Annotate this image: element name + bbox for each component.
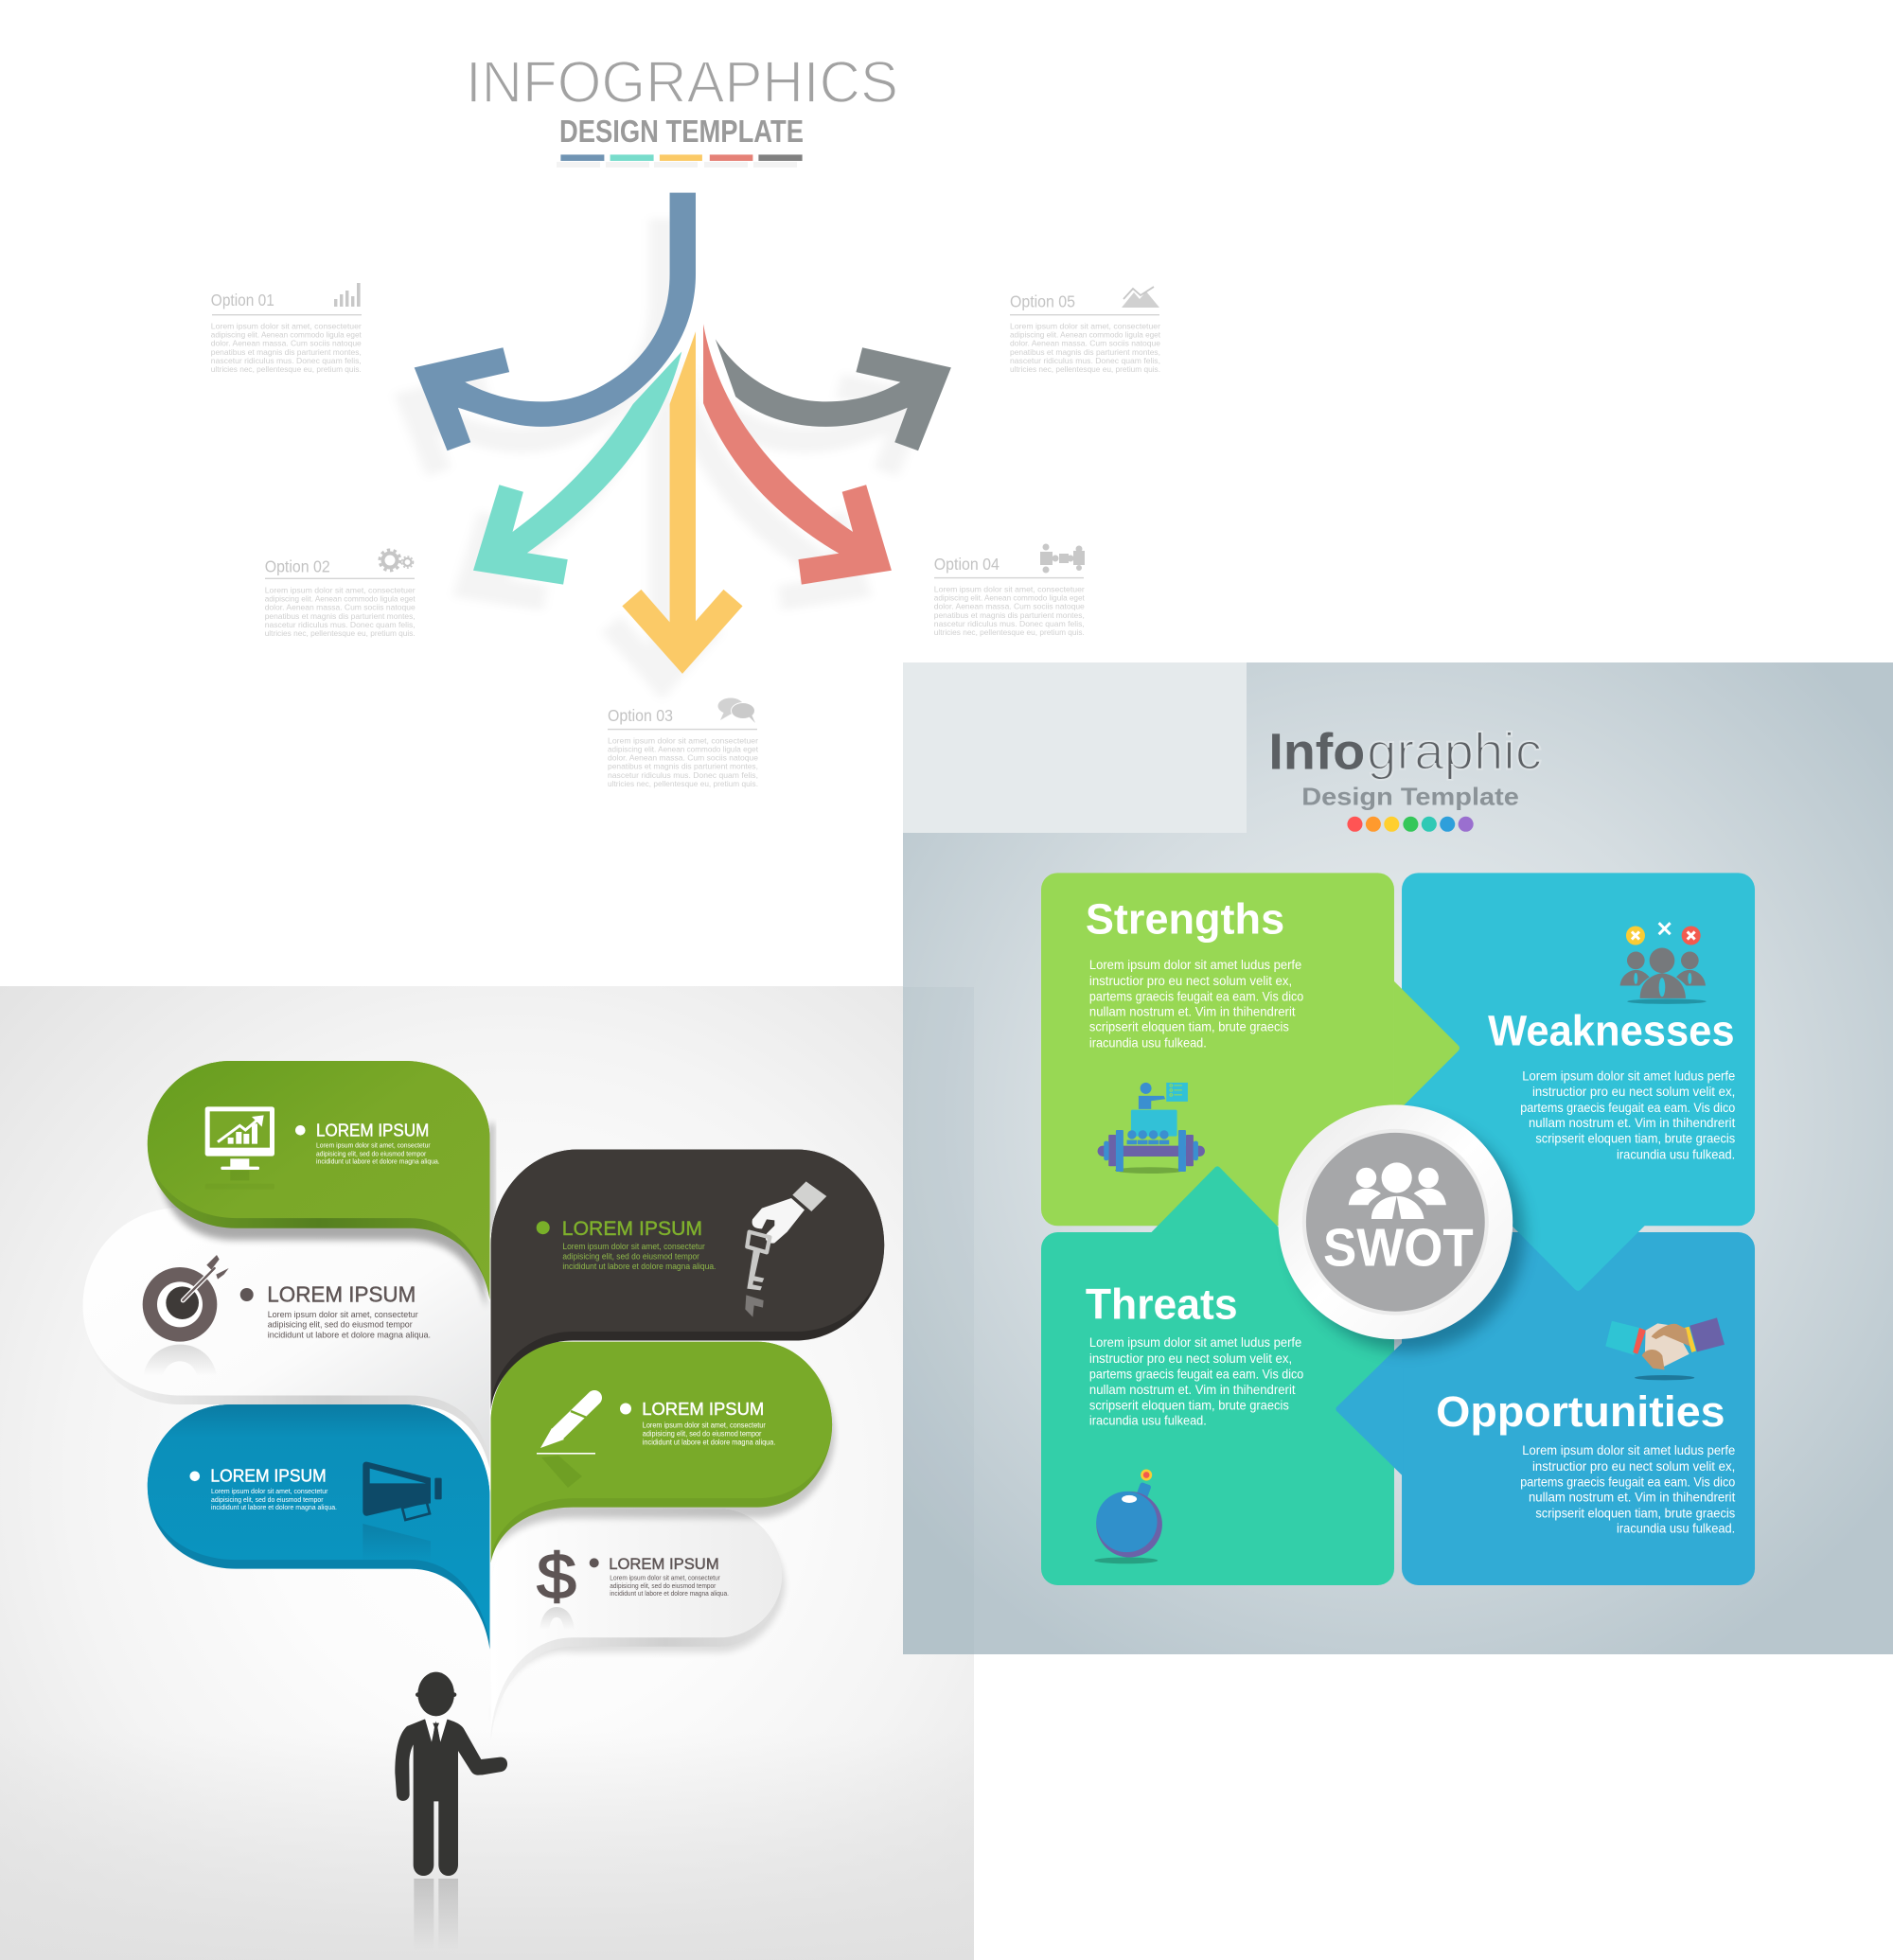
- item: green middle right: Lorem ipsum dolor sit amet, consectetur: [643, 1421, 766, 1430]
- option 03: penatibus et magnis dis parturient montes,: [608, 762, 758, 771]
- item: green middle right: [537, 1398, 775, 1488]
- option 03: Option 03: [608, 706, 673, 725]
- card: weaknesses base: [1402, 873, 1755, 1226]
- text: opportunities: [1436, 1387, 1735, 1535]
- bubble shadow: [157, 1082, 486, 1309]
- option 03: ultricies nec, pellentesque eu, pretium quis.: [608, 779, 758, 788]
- option 01: ultricies nec, pellentesque eu, pretium quis.: [211, 364, 362, 374]
- text: weaknesses: nullam nostrum et. Vim in thihendrerit: [1529, 1115, 1735, 1130]
- option 01: nascetur ridiculus mus. Donec quam felis,: [211, 356, 362, 365]
- option 02: penatibus et magnis dis parturient montes,: [265, 611, 416, 621]
- title: [466, 50, 898, 149]
- panel: SWOT background: [903, 662, 1893, 1654]
- option 05: adipiscing elit. Aenean commodo ligula eget: [1010, 330, 1161, 340]
- heading: Design Template: [1301, 785, 1519, 811]
- item: dark upper right: LOREM IPSUM: [562, 1218, 702, 1240]
- option 01: adipiscing elit. Aenean commodo ligula eget: [211, 330, 362, 340]
- icon: handshake: [1605, 1317, 1725, 1380]
- option 01: Lorem ipsum dolor sit amet, consectetuer: [211, 322, 362, 331]
- option 04: Option 04: [934, 555, 1000, 574]
- arrows diagram: [415, 193, 951, 674]
- heading: Info: [1268, 724, 1365, 780]
- option 04: ultricies nec, pellentesque eu, pretium quis.: [934, 627, 1085, 637]
- option 05: Lorem ipsum dolor sit amet, consectetuer: [1010, 322, 1160, 331]
- option 01: penatibus et magnis dis parturient montes,: [211, 347, 362, 357]
- bubble shadow: [491, 1351, 835, 1560]
- item: white middle left: [143, 1255, 431, 1375]
- icon: megaphone: [363, 1462, 442, 1562]
- text: opportunities: Lorem ipsum dolor sit amet ludus perfe: [1522, 1442, 1735, 1457]
- icon: gears: [380, 550, 413, 571]
- option 02: nascetur ridiculus mus. Donec quam felis,: [265, 620, 416, 629]
- arrow shadows: [394, 219, 930, 699]
- text: strengths: iracundia usu fulkead.: [1089, 1034, 1207, 1050]
- text: strengths: Lorem ipsum dolor sit amet ludus perfe: [1089, 957, 1301, 972]
- text: strengths: partems graecis feugait ea eam. Vis dico: [1089, 989, 1303, 1004]
- item: white lower right: Lorem ipsum dolor sit amet, consectetur: [610, 1574, 720, 1582]
- text: threats: Lorem ipsum dolor sit amet ludus perfe: [1089, 1334, 1301, 1350]
- text: weaknesses: instructior pro eu nect solum velit ex,: [1532, 1084, 1735, 1099]
- option 04: adipiscing elit. Aenean commodo ligula eget: [934, 592, 1085, 602]
- heading: [1268, 721, 1542, 811]
- arrow tab: threats: [1150, 1166, 1284, 1233]
- text: threats: nullam nostrum et. Vim in thihendrerit: [1089, 1382, 1296, 1397]
- option 05: Option 05: [1010, 291, 1075, 310]
- panel: business bubbles: [83, 1061, 884, 1950]
- item: white lower right: incididunt ut labore et dolore magna aliqua.: [610, 1589, 729, 1598]
- centre SWOT badge: [1278, 1104, 1525, 1351]
- text: weaknesses: partems graecis feugait ea eam. Vis dico: [1520, 1100, 1735, 1115]
- item: blue lower left: Lorem ipsum dolor sit amet, consectetur: [211, 1487, 328, 1495]
- item: white lower right: [537, 1541, 729, 1630]
- title: DESIGN TEMPLATE: [559, 114, 804, 149]
- option 01: [211, 283, 362, 374]
- arrow: grey option 05: [716, 339, 951, 450]
- colour dots: [1347, 817, 1474, 832]
- text: weaknesses: Lorem ipsum dolor sit amet ludus perfe: [1522, 1068, 1735, 1083]
- text: strengths: [1086, 895, 1303, 1050]
- arrow tab: strengths: [1394, 981, 1460, 1115]
- option 03: adipiscing elit. Aenean commodo ligula eget: [608, 744, 759, 753]
- option 04: dolor. Aenean massa. Cum sociis natoque: [934, 602, 1085, 611]
- bubble: green middle right: [491, 1342, 832, 1563]
- arrow: red option 04: [703, 324, 892, 585]
- option 01: dolor. Aenean massa. Cum sociis natoque: [211, 339, 362, 348]
- item: dark upper right: [537, 1181, 826, 1317]
- arrow: yellow option 03: [622, 331, 743, 674]
- option 02: dolor. Aenean massa. Cum sociis natoque: [265, 603, 416, 612]
- arrow tab: opportunities: [1336, 1342, 1403, 1476]
- icon: bomb: [1094, 1469, 1162, 1563]
- item: blue lower left: LOREM IPSUM: [210, 1467, 327, 1486]
- icon: dollar sign: $: [537, 1541, 576, 1613]
- option 02: Lorem ipsum dolor sit amet, consectetuer: [265, 585, 416, 594]
- text: threats: instructior pro eu nect solum velit ex,: [1089, 1351, 1292, 1366]
- option 02: adipiscing elit. Aenean commodo ligula eget: [265, 594, 416, 604]
- icon: people: [1349, 1162, 1446, 1219]
- item: white middle left: incididunt ut labore et dolore magna aliqua.: [268, 1331, 431, 1341]
- icon: pen: [537, 1398, 595, 1488]
- text: threats: scripserit eloquen tiam, brute graecis: [1089, 1398, 1289, 1413]
- item: green middle right: adipisicing elit, sed do eiusmod tempor: [643, 1429, 762, 1439]
- card: opportunities base: [1402, 1232, 1755, 1585]
- panel: SWOT diagram: [1041, 721, 1755, 1585]
- item: white lower right: adipisicing elit, sed do eiusmod tempor: [610, 1581, 717, 1590]
- text: threats: partems graecis feugait ea eam. Vis dico: [1089, 1367, 1303, 1382]
- arrow: blue option 01: [415, 193, 696, 450]
- icon: team with marks: [1620, 923, 1707, 1004]
- figure: businessman: [395, 1672, 507, 1950]
- text: opportunities: instructior pro eu nect solum velit ex,: [1532, 1458, 1735, 1474]
- text: strengths: Strengths: [1086, 895, 1284, 944]
- title: INFOGRAPHICS: [466, 50, 898, 115]
- text: opportunities: Opportunities: [1436, 1387, 1725, 1436]
- icon: presenter and dumbbell: [1098, 1083, 1205, 1174]
- option 03: nascetur ridiculus mus. Donec quam felis,: [608, 770, 758, 780]
- panel: business bubbles background: [0, 986, 974, 1960]
- heading: graphic: [1367, 721, 1542, 780]
- text: weaknesses: scripserit eloquen tiam, brute graecis: [1535, 1131, 1735, 1146]
- item: green upper left: LOREM IPSUM: [316, 1121, 429, 1140]
- icon: mountain chart: [1122, 287, 1159, 308]
- text: opportunities: partems graecis feugait ea eam. Vis dico: [1520, 1474, 1735, 1490]
- item: white middle left: adipisicing elit, sed do eiusmod tempor: [268, 1320, 413, 1331]
- option 03: [608, 698, 759, 788]
- option 04: penatibus et magnis dis parturient montes,: [934, 610, 1085, 620]
- option 05: dolor. Aenean massa. Cum sociis natoque: [1010, 339, 1160, 348]
- icon: hand with key: [745, 1181, 826, 1317]
- option 05: penatibus et magnis dis parturient montes,: [1010, 347, 1160, 357]
- card: strengths base: [1041, 873, 1394, 1226]
- bubble: white lower right: [491, 1510, 782, 1742]
- option 04: nascetur ridiculus mus. Donec quam felis,: [934, 619, 1085, 628]
- icon: chat bubbles: [717, 698, 755, 723]
- bubble shapes: [83, 1061, 884, 1742]
- panel: arrows infographic: [211, 50, 1161, 788]
- option 03: dolor. Aenean massa. Cum sociis natoque: [608, 753, 758, 763]
- item: green middle right: LOREM IPSUM: [642, 1399, 764, 1419]
- item: green upper left: adipisicing elit, sed do eiusmod tempor: [316, 1149, 427, 1157]
- option 03: Lorem ipsum dolor sit amet, consectetuer: [608, 735, 758, 745]
- icon: puzzle: [1040, 543, 1085, 574]
- text: threats: Threats: [1086, 1280, 1238, 1329]
- item: green upper left: Lorem ipsum dolor sit amet, consectetur: [316, 1141, 431, 1150]
- text: threats: [1086, 1280, 1303, 1428]
- option 02: [265, 550, 416, 638]
- text: strengths: instructior pro eu nect solum velit ex,: [1089, 973, 1292, 988]
- seam shadow: [489, 1123, 494, 1231]
- text: threats: iracundia usu fulkead.: [1089, 1413, 1207, 1428]
- bubble: dark upper right: [491, 1149, 884, 1410]
- option 04: [934, 543, 1085, 637]
- item: blue lower left: incididunt ut labore et dolore magna aliqua.: [211, 1503, 337, 1511]
- label: SWOT: SWOT: [1323, 1217, 1474, 1277]
- option 04: Lorem ipsum dolor sit amet, consectetuer: [934, 584, 1085, 593]
- text: opportunities: iracundia usu fulkead.: [1617, 1520, 1735, 1535]
- option 05: ultricies nec, pellentesque eu, pretium quis.: [1010, 364, 1160, 374]
- text: weaknesses: iracundia usu fulkead.: [1617, 1146, 1735, 1161]
- item: white lower right: LOREM IPSUM: [609, 1555, 719, 1573]
- item: green upper left: incididunt ut labore et dolore magna aliqua.: [316, 1157, 440, 1166]
- icon: target: [143, 1255, 229, 1375]
- text: opportunities: scripserit eloquen tiam, brute graecis: [1535, 1505, 1735, 1520]
- item: blue lower left: [189, 1462, 442, 1562]
- colour key bars: [557, 154, 803, 168]
- card: threats base: [1041, 1232, 1394, 1585]
- item: green upper left: [205, 1106, 440, 1190]
- arrow: teal option 02: [473, 351, 681, 585]
- arrow tab: weaknesses: [1511, 1225, 1646, 1291]
- item: dark upper right: Lorem ipsum dolor sit amet, consectetur: [562, 1242, 705, 1251]
- text: opportunities: nullam nostrum et. Vim in thihendrerit: [1529, 1490, 1735, 1505]
- option 05: [1010, 287, 1161, 374]
- option 02: Option 02: [265, 556, 330, 575]
- text: weaknesses: Weaknesses: [1488, 1006, 1735, 1054]
- bubble: blue lower left: [148, 1404, 489, 1650]
- option 02: ultricies nec, pellentesque eu, pretium quis.: [265, 628, 416, 638]
- item: dark upper right: incididunt ut labore et dolore magna aliqua.: [562, 1262, 716, 1271]
- text: weaknesses: [1488, 1006, 1735, 1161]
- bubble shadow: [491, 1518, 785, 1722]
- text: strengths: nullam nostrum et. Vim in thihendrerit: [1089, 1004, 1296, 1019]
- option 05: nascetur ridiculus mus. Donec quam felis,: [1010, 356, 1160, 365]
- text: strengths: scripserit eloquen tiam, brute graecis: [1089, 1019, 1289, 1034]
- item: dark upper right: adipisicing elit, sed do eiusmod tempor: [562, 1252, 699, 1262]
- bubble: white middle left: [83, 1208, 489, 1469]
- item: white middle left: Lorem ipsum dolor sit amet, consectetur: [268, 1310, 418, 1320]
- icon: monitor chart: [205, 1106, 274, 1190]
- icon: bar chart: [334, 283, 361, 307]
- leg reflections: [414, 1879, 458, 1950]
- item: white middle left: LOREM IPSUM: [267, 1282, 416, 1307]
- item: green middle right: incididunt ut labore et dolore magna aliqua.: [643, 1438, 775, 1446]
- item: blue lower left: adipisicing elit, sed do eiusmod tempor: [211, 1495, 324, 1504]
- option 01: Option 01: [211, 291, 274, 309]
- bubble: green upper left: [148, 1061, 489, 1300]
